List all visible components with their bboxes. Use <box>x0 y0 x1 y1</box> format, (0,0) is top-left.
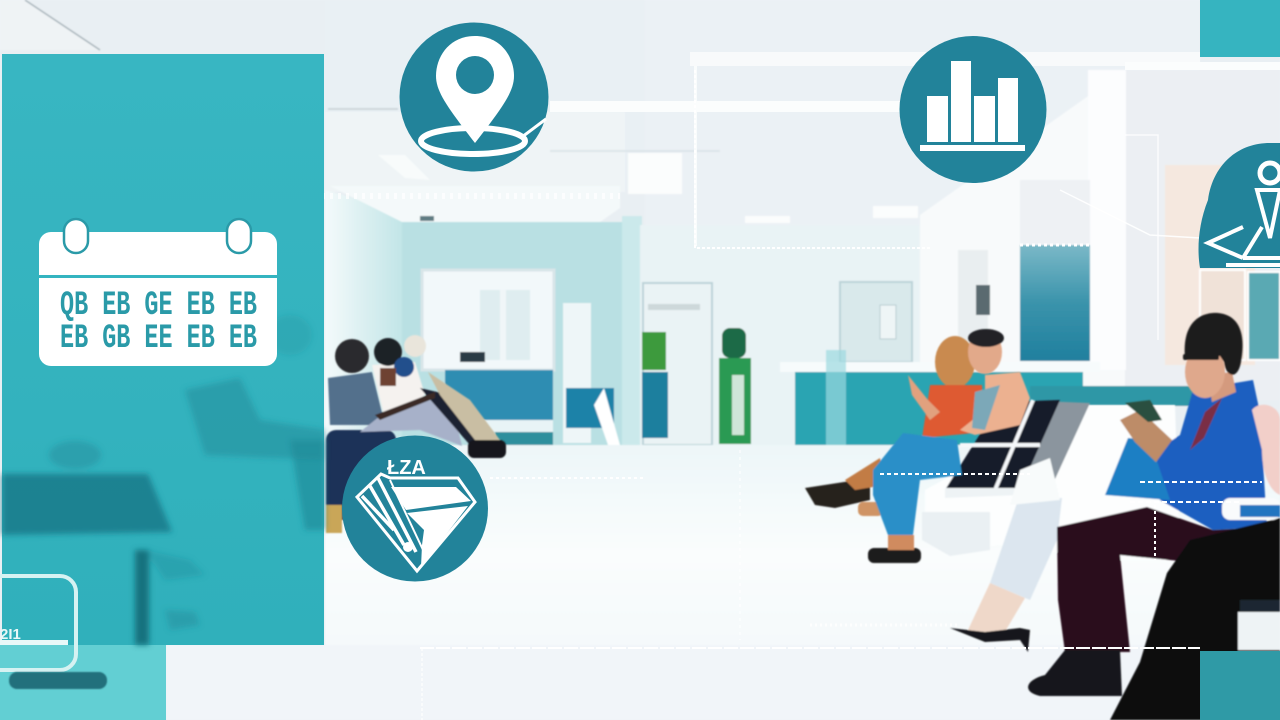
glowing frame lines <box>550 52 1280 246</box>
calendar text: QB EB GE EB EB <box>60 287 257 325</box>
plant and cylinder <box>642 332 666 370</box>
block: top right teal <box>1200 0 1280 57</box>
calendar text: EB GB EE EB EB <box>60 320 257 358</box>
bottom left light teal block <box>0 645 166 720</box>
icon: bar chart <box>900 36 1046 183</box>
icon glyph text: ŁZA <box>387 457 426 479</box>
man with tank top <box>968 330 1002 374</box>
right architecture <box>920 70 1280 400</box>
woman with orange top <box>935 336 975 388</box>
front patient <box>1110 518 1280 720</box>
icon: location pin <box>400 22 548 172</box>
teal reception desk <box>795 372 1083 445</box>
woman with white trousers <box>990 498 1062 600</box>
calendar text <box>60 287 257 358</box>
man with blue shirt <box>1150 380 1267 530</box>
blue jeans <box>873 433 962 535</box>
icon frame: bottom left screen <box>0 576 76 670</box>
floor <box>325 445 1280 720</box>
right pair of seated patients and chairs <box>805 313 1280 720</box>
doors <box>643 283 712 445</box>
block: bottom right teal <box>1200 651 1280 720</box>
back wall <box>402 222 640 446</box>
panel: teal calendar panel <box>2 54 325 645</box>
white chair row <box>925 405 1180 560</box>
icon: diamond with pencil <box>342 436 488 582</box>
icon frame: bottom left screen: 2I1 <box>0 626 21 643</box>
dotted white connector lines <box>290 70 1262 720</box>
faded patient silhouettes inside panel <box>2 315 325 645</box>
icon: calendar <box>39 219 277 366</box>
group of seated patients, back left <box>326 335 506 533</box>
icon: cut-off pin on map <box>1199 143 1280 268</box>
reception counter <box>445 370 553 420</box>
window <box>422 270 554 370</box>
soffit <box>330 186 620 222</box>
dark shadow bar <box>9 672 107 689</box>
